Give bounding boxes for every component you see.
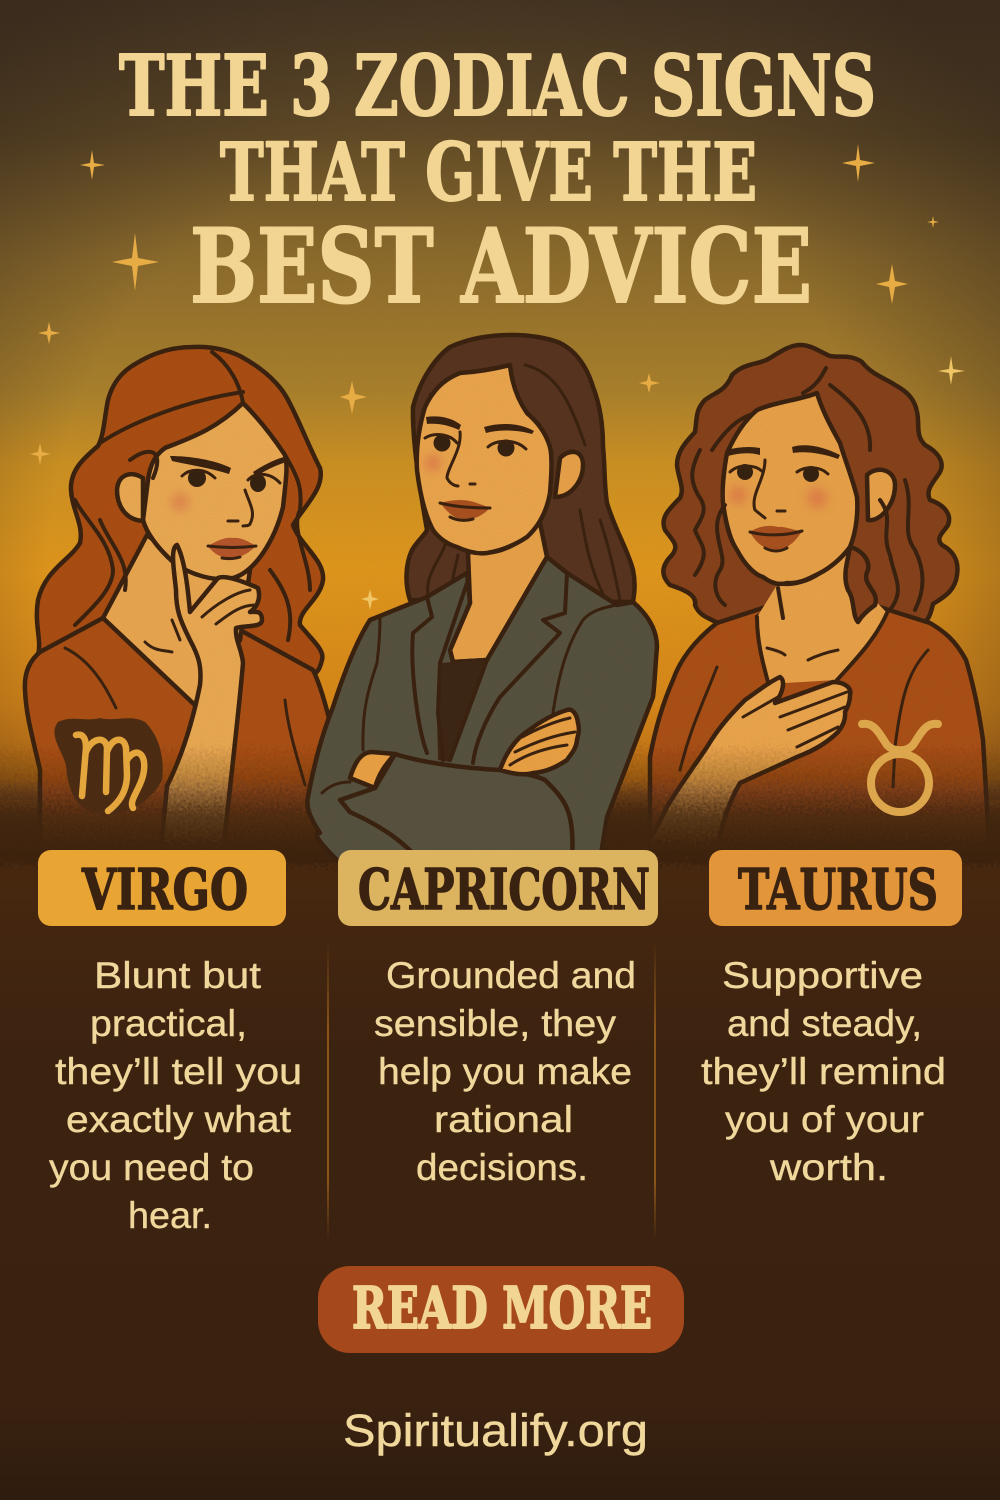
Virgo cheek blush [171, 493, 189, 511]
Virgo ear [117, 474, 143, 521]
Taurus description: you of your [725, 1099, 924, 1140]
Taurus name: TAURUS [738, 857, 938, 923]
Taurus neckline [757, 588, 887, 682]
Virgo description: Blunt but [94, 955, 262, 996]
Taurus lip line [750, 531, 802, 551]
Capricorn lip line [440, 503, 490, 520]
button shape [318, 1266, 684, 1353]
Virgo finger and collar lines [145, 590, 255, 652]
Virgo dark patch [54, 718, 163, 815]
Virgo face [143, 403, 286, 579]
Capricorn hair [406, 335, 635, 602]
Virgo hair strands [75, 352, 310, 640]
Virgo description: they’ll tell you [55, 1051, 302, 1092]
Capricorn eye lids and nose [425, 432, 526, 486]
title [119, 37, 876, 327]
Capricorn cheek blush [425, 455, 441, 471]
Capricorn pill [338, 850, 658, 926]
figure: Taurus woman with curly hair [640, 345, 990, 860]
Capricorn blazer [307, 557, 657, 860]
Virgo hand and arm [160, 545, 262, 860]
Taurus eye lids and nose [730, 460, 828, 518]
Taurus cheek blush [729, 486, 827, 508]
Virgo description: practical, [90, 1003, 247, 1044]
Capricorn name: CAPRICORN [358, 857, 650, 923]
Taurus hair lock over neck [845, 547, 876, 622]
Capricorn eyes [434, 434, 514, 456]
Capricorn lips [440, 500, 490, 519]
background vignette [0, 0, 1000, 800]
Virgo name: VIRGO [81, 857, 248, 923]
Virgo eye lids and nose [182, 470, 280, 526]
Virgo lips [208, 538, 256, 558]
Virgo description: exactly what [66, 1099, 292, 1140]
Taurus eyebrows [726, 445, 840, 459]
Capricorn shoulder seams [363, 605, 617, 750]
star [927, 216, 939, 228]
read more button [318, 1266, 684, 1353]
column divider right [654, 940, 656, 1240]
Capricorn forearm [340, 754, 573, 860]
Taurus description: they’ll remind [701, 1051, 946, 1092]
Taurus hand and arm [640, 677, 850, 860]
star [112, 233, 159, 291]
Virgo label [38, 850, 286, 926]
dark fade over lower figures [0, 735, 1000, 865]
Taurus ear [867, 470, 895, 520]
icon: Taurus symbol [862, 724, 938, 812]
figure: Virgo woman with hand on chin [25, 347, 335, 860]
Capricorn description: rational [434, 1099, 573, 1140]
Virgo hair [37, 347, 323, 674]
Virgo lip line [208, 546, 256, 559]
Capricorn description: help you make [378, 1051, 632, 1092]
Capricorn undershirt [437, 660, 487, 762]
Capricorn ear [555, 452, 583, 497]
Capricorn chin shadow [457, 537, 527, 555]
Taurus hair curls [692, 368, 922, 610]
icon: Virgo symbol with dark patch [54, 718, 163, 815]
Capricorn label [338, 850, 658, 926]
Taurus face [723, 393, 857, 584]
Taurus pill [709, 850, 962, 926]
Taurus description: worth. [769, 1147, 888, 1188]
button label: READ MORE [352, 1275, 652, 1342]
Capricorn neck [450, 523, 547, 662]
star [361, 589, 379, 610]
Virgo description: you need to [49, 1147, 254, 1188]
Taurus hair [663, 345, 957, 626]
star [842, 144, 875, 182]
film grain texture [0, 0, 1000, 850]
Taurus collar lines [767, 648, 838, 660]
Capricorn hair strands [428, 365, 620, 600]
Taurus lips [750, 526, 802, 551]
Virgo eyes [188, 469, 266, 492]
Capricorn description: sensible, they [374, 1003, 617, 1044]
Virgo pill [38, 850, 286, 926]
Taurus horns [862, 724, 938, 750]
title line 2: THAT GIVE THE [220, 125, 757, 219]
Capricorn face [417, 365, 552, 553]
column divider left [327, 940, 329, 1240]
star [30, 443, 51, 465]
Taurus shirt [650, 603, 990, 860]
Taurus label [709, 850, 962, 926]
Virgo glyph [76, 735, 144, 811]
Capricorn right hand [500, 710, 579, 774]
figure: Capricorn woman with crossed arms [307, 335, 657, 860]
Capricorn description: Grounded and [386, 955, 636, 996]
star [938, 356, 965, 385]
Capricorn description [374, 955, 636, 1188]
star [38, 322, 60, 344]
Virgo neck and chest [103, 535, 250, 707]
Taurus finger lines [743, 692, 847, 747]
decorative stars [30, 144, 965, 610]
Virgo description [49, 955, 302, 1236]
star [639, 373, 660, 393]
Taurus neck and chest [757, 550, 887, 684]
Virgo eyebrows [170, 456, 288, 477]
Capricorn elbow fold [322, 782, 350, 793]
star [80, 150, 105, 180]
footer website: Spiritualify.org [343, 1405, 648, 1456]
Taurus description: Supportive [722, 955, 923, 996]
Virgo dress [25, 618, 335, 860]
star [340, 381, 367, 414]
Taurus eyes [737, 464, 819, 482]
Virgo description: hear. [128, 1195, 212, 1236]
Capricorn eyebrows [426, 416, 534, 434]
Taurus shirt folds [680, 650, 928, 787]
Capricorn lapels [412, 557, 567, 763]
Taurus circle [871, 754, 929, 812]
title line 3: BEST ADVICE [190, 207, 812, 327]
Taurus chin shadow [763, 558, 838, 586]
Capricorn description: decisions. [416, 1147, 588, 1188]
Virgo sleeve folds [65, 648, 305, 785]
Taurus description [701, 955, 946, 1188]
star [876, 264, 908, 304]
Capricorn left hand [350, 752, 395, 788]
Capricorn finger lines [510, 718, 575, 765]
Taurus description: and steady, [727, 1003, 922, 1044]
